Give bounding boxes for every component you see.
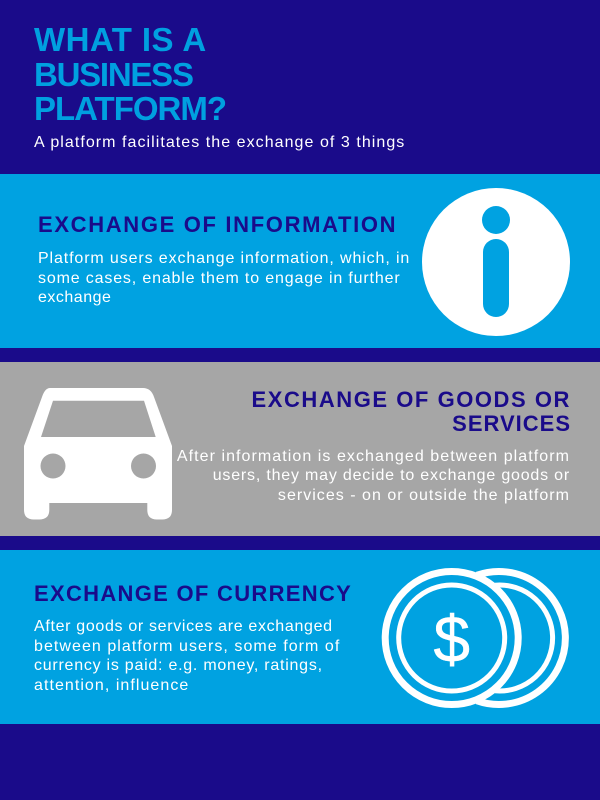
- text: goods or services: services - on or outside the platform: [278, 487, 570, 504]
- heading: goods or services: EXCHANGE OF GOODS OR: [252, 387, 571, 412]
- panel: exchange of currency: [0, 550, 600, 724]
- title: WHAT IS A: [34, 21, 207, 58]
- text: goods or services: [177, 448, 570, 504]
- text: goods or services: After information is exchanged between platform: [177, 448, 570, 465]
- panel: exchange of information: [0, 174, 600, 348]
- icon: information: [422, 188, 570, 336]
- text: information: Platform users exchange information, which, in: [38, 250, 410, 267]
- text: currency: between platform users, some form of: [34, 638, 340, 655]
- text: currency: After goods or services are exchanged: [34, 618, 333, 635]
- text: currency: attention, influence: [34, 677, 189, 694]
- text: information: exchange: [38, 289, 111, 306]
- heading: information: EXCHANGE OF INFORMATION: [38, 212, 397, 237]
- panel: exchange of goods or services: [0, 362, 600, 536]
- icon: coins: $: [433, 602, 470, 676]
- title: PLATFORM?: [34, 90, 226, 127]
- heading: goods or services: [252, 387, 571, 436]
- text: currency: [34, 618, 340, 694]
- text: goods or services: users, they may decide to exchange goods or: [213, 467, 570, 484]
- subtitle: A platform facilitates the exchange of 3 things: [34, 134, 405, 151]
- title: [34, 21, 226, 127]
- text: currency: currency is paid: e.g. money, ratings,: [34, 657, 323, 674]
- text: information: some cases, enable them to engage in further: [38, 270, 400, 286]
- heading: goods or services: SERVICES: [452, 410, 571, 436]
- icon: coins: [382, 568, 569, 708]
- icon: car: [24, 388, 172, 520]
- text: information: [38, 250, 410, 306]
- heading: currency: EXCHANGE OF CURRENCY: [34, 581, 352, 606]
- title: BUSINESS: [34, 56, 193, 92]
